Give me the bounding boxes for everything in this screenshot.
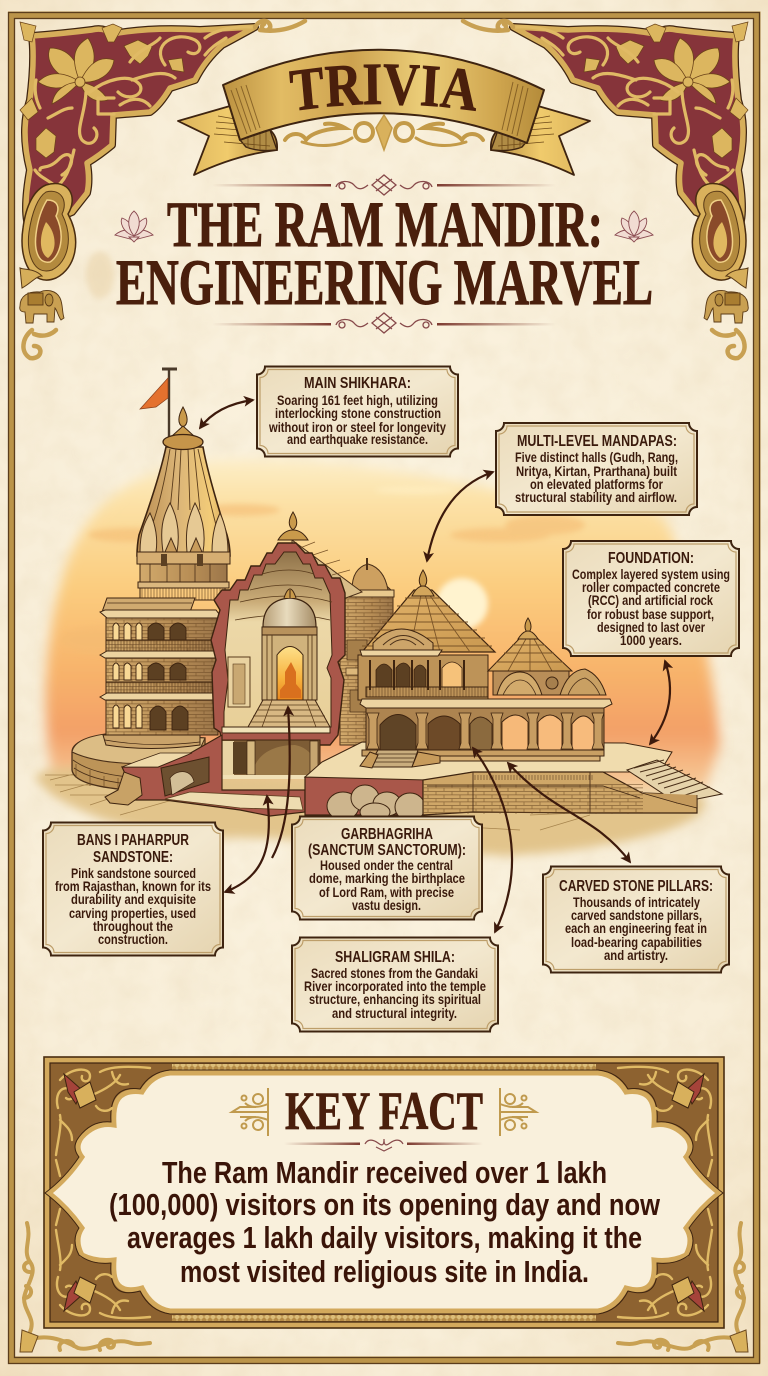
floor slab [222,727,330,733]
callout: carved stone pillars: each an engineering feat in [565,920,707,936]
key fact text: most visited religious site in India. [180,1254,589,1289]
cutaway dome roof stones [292,540,362,602]
callout: garbhagriha: dome, marking the birthplace [309,870,465,886]
paisley [22,184,76,280]
key fact text: The Ram Mandir received over 1 lakh [162,1155,607,1190]
callout: garbhagriha: GARBHAGRIHA [341,826,433,843]
flourish below banner [285,115,483,150]
middle arcade [113,663,186,680]
callout: garbhagriha: (SANCTUM SANCTORUM): [308,842,466,859]
callout: main shikhara: interlocking stone construction [275,405,441,421]
callout: foundation [563,541,739,656]
temple illustration [34,369,722,856]
lower arcade [113,705,188,730]
callout: garbhagriha [292,816,482,920]
callout: bans i paharpur sandstone: SANDSTONE: [93,849,173,866]
shrine glowing niche [277,646,303,700]
callout: main shikhara: MAIN SHIKHARA: [304,375,411,392]
upper tier roof [102,598,195,612]
large pyramid roof [362,590,495,652]
callout: bans i paharpur sandstone: BANS I PAHARPUR [77,832,189,849]
basement chamber [222,740,320,777]
panel corner ornament top left [56,1067,150,1176]
callout: carved stone pillars: CARVED STONE PILLARS: [559,878,713,895]
banner tail left [178,106,277,175]
callout: bans i paharpur sandstone: from Rajasthan, known for its [55,878,211,894]
flag [140,378,168,409]
callout: main shikhara: Soaring 161 feet high, utilizing [277,392,438,408]
flourish left of heading [232,1088,268,1136]
callout: foundation: 1000 years. [620,632,682,648]
arrow: bansi paharpur [225,796,269,892]
banner tail right [491,106,590,175]
flagpole [168,369,170,437]
interior [224,552,332,727]
arrow: shaligram [473,748,512,932]
key fact text: averages 1 lakh daily visitors, making it the [127,1220,642,1255]
callout: multi-level mandapas [496,423,697,515]
key fact heading: KEY FACT [285,1081,483,1141]
floor paving [165,792,303,810]
callout: bans i paharpur sandstone: durability and exquisite [71,891,196,907]
callout: shaligram shila: Sacred stones from the Gandaki [311,965,478,981]
panel cream interior [49,1073,719,1311]
banner main ribbon [223,50,544,143]
shikhara mini spires [140,503,228,552]
sun [436,578,488,630]
mandapa wall [358,655,488,700]
corner ornament: top right [463,21,748,358]
key fact divider [284,1139,483,1151]
key fact panel [44,1057,724,1328]
key fact text [109,1155,661,1289]
callout: shaligram shila: structure, enhancing its spiritual [309,991,481,1007]
flourish right of heading [500,1088,536,1136]
colonnade base [362,750,604,756]
lower colonnade [360,699,612,768]
callout: foundation: roller compacted concrete [582,579,720,595]
tower drum [137,552,230,564]
inner shrine frame [262,627,317,700]
callout: main shikhara: without iron or steel for longevity [268,419,446,435]
upper arcade openings [376,662,462,687]
panel corner ornament top right [618,1067,712,1176]
panel frame [44,1057,724,1328]
callout: foundation: FOUNDATION: [608,550,694,567]
panel corner ornament bottom left [56,1209,150,1318]
callout: shaligram shila: and structural integrity. [332,1005,457,1021]
callout: multi-level mandapas: structural stability and airflow. [515,489,677,505]
lower scroll [23,330,56,358]
sunset sky wash [46,459,720,792]
mandapa two [488,618,606,695]
callout: garbhagriha: vastu design. [352,897,421,913]
rough stone base [105,772,142,805]
callout: bans i paharpur sandstone: throughout the [93,918,173,934]
arrow: mandapas [427,472,493,561]
panel corner ornament bottom right [618,1209,712,1318]
callout: bans i paharpur sandstone: Pink sandstone sourced [71,865,196,881]
callout: carved stone pillars [543,866,729,972]
callout: carved stone pillars: Thousands of intricately [573,894,700,910]
callout: shaligram shila: River incorporated into the temple [304,978,486,994]
arrow: garbhagriha [272,707,290,858]
right pediments [497,672,542,695]
red foundation right [305,777,423,815]
finial and amalaka [179,407,187,427]
callout: bans i paharpur sandstone: construction. [98,931,168,947]
callout: foundation: (RCC) and artificial rock [588,592,713,608]
callout: multi-level mandapas: MULTI-LEVEL MANDAPAS: [517,433,677,450]
banner title: TRIVIA [289,64,476,112]
tower steps [103,735,200,748]
main tower [100,369,230,748]
callout: garbhagriha: of Lord Ram, with precise [319,884,454,900]
callout: multi-level mandapas: Five distinct halls (Gudh, Rang, [515,449,678,465]
arches [380,714,594,750]
platform [305,742,722,815]
boulders [327,785,425,821]
inner dome [263,598,316,627]
arrow: carved pillars [508,763,630,862]
gold scrolls [35,27,252,190]
arrow: main shikhara [200,400,253,428]
callout: bans i paharpur sandstone [43,822,223,956]
callout: carved stone pillars: load-bearing capabilities [571,934,702,950]
title [116,189,653,319]
right staircase [627,760,722,803]
small lotuses [20,22,184,158]
red foundation left [122,735,305,816]
bottom corner flourish left [20,1223,150,1352]
callout: multi-level mandapas: Nritya, Kirtan, Prarthana) built [516,463,677,479]
callout: shaligram shila [292,938,498,1032]
pillars [367,713,604,749]
lotus in corner [38,38,114,104]
central stairs [248,700,330,727]
top divider [212,175,556,195]
callout: multi-level mandapas: on elevated platforms for [530,476,663,492]
second pyramid roof [488,637,572,671]
callout: bans i paharpur sandstone: carving properties, used [69,905,196,921]
shikhara spire [137,447,230,556]
callout: main shikhara: and earthquake resistance. [287,431,428,447]
basement left opening [161,757,209,796]
ground [34,768,705,856]
front steps [368,750,418,767]
lotus left [115,211,153,242]
callout: carved stone pillars: and artistry. [604,947,668,963]
banner title [289,64,476,112]
callout: main shikhara [257,366,458,456]
callout: foundation: designed to last over [597,619,705,635]
rear building behind cutaway [336,558,394,745]
deity silhouette [280,662,301,698]
plinth of main tower [72,733,205,790]
second drum [493,671,569,695]
callout: foundation: for robust base support, [587,606,714,622]
key fact text: (100,000) visitors on its opening day and now [109,1187,661,1222]
cutaway section [105,512,425,821]
corner ornament: top left [20,21,305,358]
side shrine [228,657,250,707]
banner [177,48,591,176]
tier walls [106,618,218,735]
upper arcade [113,623,186,640]
end scroll [255,21,305,31]
pediment [373,629,433,652]
lower divider [212,313,556,333]
callout: garbhagriha: Housed onder the central [320,857,453,873]
elephant [20,290,64,323]
cutaway red wall [211,543,345,745]
bottom corner flourish right [618,1223,748,1352]
callout: carved stone pillars: carved sandstone pillars, [571,907,702,923]
arrow: foundation [650,661,670,744]
callout: shaligram shila: SHALIGRAM SHILA: [335,949,455,966]
lotus right [615,211,653,242]
mandapa one [358,570,495,700]
